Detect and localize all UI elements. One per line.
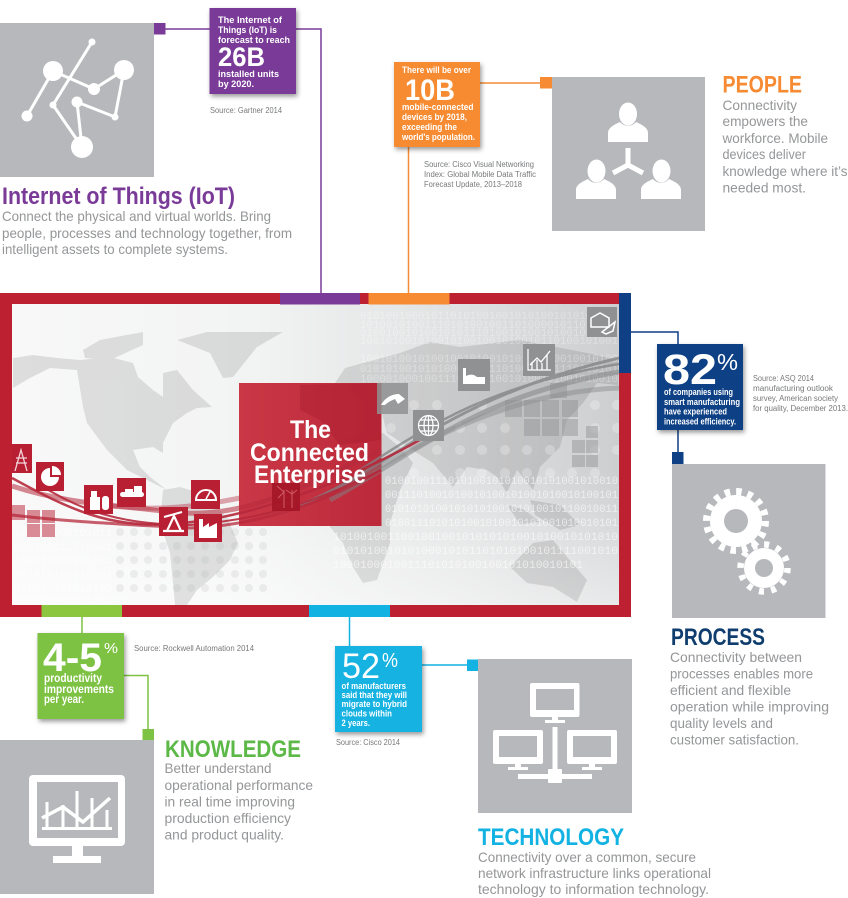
connector: IoT xyxy=(154,23,321,293)
text: Technology description: technology to information technology. xyxy=(478,881,709,897)
text: People description: workforce. Mobile xyxy=(722,130,828,146)
callout: 52%: clouds within xyxy=(342,708,392,720)
text: Knowledge description: production efficiency xyxy=(164,810,291,826)
heading: Process: PROCESS xyxy=(671,624,765,651)
text: Technology description xyxy=(478,849,711,897)
binary data pattern: top: 1000010001001110101010010100101001010010 xyxy=(360,374,618,386)
callout: 4-5%: % xyxy=(104,640,118,657)
callout: 10B xyxy=(394,62,480,147)
binary data pattern: bottom: 100111001001001 xyxy=(14,556,112,568)
binary data pattern: top: 1010010100111010100100110100001011010101 xyxy=(360,320,618,332)
source: Cisco VNI: Index: Global Mobile Data Traffic xyxy=(424,170,536,179)
title: The Connected Enterprise: Enterprise xyxy=(254,461,366,489)
callout: 52%: of manufacturers xyxy=(342,681,406,692)
text: People description: Connectivity xyxy=(722,97,797,113)
icon: refinery xyxy=(84,485,113,514)
text: People description: devices deliver xyxy=(722,146,806,162)
icon: pie chart xyxy=(36,462,64,491)
text: People description: empowers the xyxy=(722,113,808,129)
callout: 4-5% xyxy=(38,633,124,719)
source: ASQ: manufacturing outlook xyxy=(753,384,834,393)
heading: Technology: TECHNOLOGY xyxy=(478,824,624,851)
icon: wind turbine xyxy=(272,483,300,511)
callout: 4-5%: 4-5 xyxy=(43,636,102,680)
binary data pattern: bottom: 010011101010100 xyxy=(14,584,112,596)
callout: 82%: have experienced xyxy=(664,406,727,418)
text: Process description: customer satisfaction. xyxy=(670,732,799,748)
title: The Connected Enterprise xyxy=(250,416,369,489)
callout: 52%: % xyxy=(382,650,398,672)
text: Knowledge description xyxy=(164,760,313,842)
text: Knowledge description: in real time improving xyxy=(164,794,295,810)
callout: 10B: There will be over xyxy=(402,65,471,76)
callout: 82% xyxy=(657,344,743,430)
text: Internet of Things description: people, processes and technology together, from xyxy=(2,225,292,241)
binary data pattern: bottom: 1000100010011101010100100101010010101 xyxy=(333,560,583,572)
text: Internet of Things description xyxy=(2,208,292,257)
callout: 52%: said that they will xyxy=(342,690,407,701)
binary data pattern: top xyxy=(360,311,618,386)
connection swooshes: gray xyxy=(300,358,619,505)
source: Cisco: Source: Cisco 2014 xyxy=(336,738,400,747)
title: The Connected Enterprise: The xyxy=(290,416,331,444)
source: Cisco VNI: Forecast Update, 2013–2018 xyxy=(424,180,523,189)
binary data pattern: bottom: 011101001011101 xyxy=(14,596,112,608)
binary data pattern: top: 1001010010100100101001010100010010010100 xyxy=(360,354,618,366)
icon panel: Internet of Things xyxy=(0,23,154,177)
binary data pattern: bottom: 101001001100100100101010101001010010101010 xyxy=(333,532,618,544)
small gray tiles xyxy=(505,383,598,467)
text: Knowledge description: and product quality. xyxy=(164,826,284,842)
callout: 26B: installed units xyxy=(218,69,279,80)
dot grid xyxy=(116,528,267,592)
text: Process description: Connectivity between xyxy=(670,649,802,665)
world map xyxy=(13,332,618,605)
text: Knowledge description: operational performance xyxy=(164,777,313,793)
source: Rockwell: Source: Rockwell Automation 2014 xyxy=(134,644,255,653)
heading: People: PEOPLE xyxy=(722,72,802,98)
heading: Knowledge: KNOWLEDGE xyxy=(165,736,301,763)
callout: 10B: devices by 2018, xyxy=(402,112,467,123)
callout: 26B: The Internet of xyxy=(218,15,283,26)
connector: People xyxy=(408,77,552,293)
callout: 4-5%: improvements xyxy=(44,684,114,696)
source: ASQ: for quality, December 2013. xyxy=(753,404,848,413)
callout: 26B: forecast to reach xyxy=(218,35,290,46)
text: Process description: processes enables more xyxy=(670,666,813,682)
source: ASQ xyxy=(753,374,848,413)
icon panel: Technology xyxy=(478,659,632,813)
connector: Process xyxy=(631,332,684,464)
binary data pattern: top: 0100100101001010111010010100101001010010 xyxy=(360,328,618,340)
callout: 52%: 52 xyxy=(342,647,380,686)
icon panel: Process xyxy=(672,464,826,618)
callout: 26B xyxy=(210,8,296,94)
binary data pattern: top: 1001010010100101001001010010110100101001 xyxy=(360,336,618,348)
small faded red tiles xyxy=(12,505,55,537)
text: Process description: efficient and flexible xyxy=(670,682,791,698)
text: Technology description: Connectivity over a common, secure xyxy=(478,849,696,865)
center title box xyxy=(239,383,382,526)
callout: 82%: smart manufacturing xyxy=(664,397,740,408)
callout: 26B: by 2020. xyxy=(218,79,254,90)
icon: line chart xyxy=(523,344,555,376)
source: Cisco VNI: Source: Cisco Visual Networking xyxy=(424,160,534,169)
connection swooshes: red xyxy=(12,440,420,528)
callout: 82%: increased efficiency. xyxy=(664,416,736,428)
callout: 10B: exceeding the xyxy=(402,122,457,133)
text: Process description xyxy=(670,649,829,748)
icon: plant xyxy=(458,359,490,391)
binary data pattern: bottom: 0101010100101010100101010010110010011 xyxy=(385,504,618,516)
text: Internet of Things description: intelligent assets to complete systems. xyxy=(2,241,228,257)
binary data pattern: bottom: 010101001010100010101101010100101111001010 xyxy=(333,546,618,558)
icon: cloud xyxy=(377,383,408,414)
text: Internet of Things description: Connect the physical and virtual worlds. Bring xyxy=(2,208,271,224)
panel: central map xyxy=(12,304,622,608)
icon panel: People xyxy=(552,77,705,231)
binary data pattern: top: 0101010010101000101011010010011110100101 xyxy=(360,364,618,376)
source: Cisco VNI xyxy=(424,160,536,189)
callout: 4-5%: productivity xyxy=(44,673,103,685)
title: The Connected Enterprise: Connected xyxy=(250,439,369,467)
connector: Technology xyxy=(350,617,478,671)
callout: 52% xyxy=(335,646,422,732)
panel frame xyxy=(0,293,631,617)
icon: hand and box xyxy=(587,307,617,337)
icon: factory xyxy=(194,514,222,542)
binary data pattern: bottom: 000100111010101 xyxy=(14,542,112,554)
callout: 26B: 26B xyxy=(218,42,265,72)
heading: Internet of Things: Internet of Things (IoT) xyxy=(2,183,235,210)
binary data pattern: bottom: 0100100111010100101010010101001010010 xyxy=(385,476,618,488)
callout: 82%: % xyxy=(717,349,738,375)
text: Process description: operation while improving xyxy=(670,698,829,714)
callout: 10B: world's population. xyxy=(401,132,475,143)
icon panel: Knowledge xyxy=(0,740,154,894)
text: Technology description: network infrastructure links operational xyxy=(478,865,711,881)
connector: Knowledge xyxy=(82,617,154,740)
text: People description xyxy=(722,97,848,196)
callout: 82%: 82 xyxy=(663,346,717,394)
text: Process description: quality levels and xyxy=(670,715,773,731)
text: People description: needed most. xyxy=(722,180,806,196)
binary data pattern: bottom xyxy=(334,476,618,568)
icon: conveyor xyxy=(117,478,146,507)
icon: oil pump xyxy=(159,507,188,536)
binary data pattern: bottom: 0011101001010010100101001010010100101 xyxy=(385,490,618,502)
callout: 26B: Things (IoT) is xyxy=(218,25,277,36)
callout: 82%: of companies using xyxy=(664,387,733,398)
binary data pattern: bottom: 001010100010101 xyxy=(14,570,112,582)
icon: pylon xyxy=(12,444,32,473)
callout: 10B: 10B xyxy=(405,74,455,107)
callout: 52%: 2 years. xyxy=(342,718,370,729)
callout: 52%: migrate to hybrid xyxy=(342,699,407,710)
callout: 10B: mobile-connected xyxy=(402,102,474,113)
binary data pattern: top: 0101001000101101010010010101001010100101 xyxy=(360,311,618,323)
icon: gauge xyxy=(191,480,220,509)
source: ASQ: Source: ASQ 2014 xyxy=(753,374,815,383)
binary data pattern: bottom: 0100111010101001010010101001010010101 xyxy=(385,518,618,530)
binary data pattern: bottom: 100101000101011 xyxy=(14,528,112,540)
icon: globe xyxy=(413,410,444,441)
source: Gartner: Source: Gartner 2014 xyxy=(210,106,283,115)
callout: 4-5%: per year. xyxy=(44,694,84,706)
text: Knowledge description: Better understand xyxy=(164,760,272,776)
light dots on Asia xyxy=(386,400,622,478)
source: ASQ: survey, American society xyxy=(753,394,838,403)
